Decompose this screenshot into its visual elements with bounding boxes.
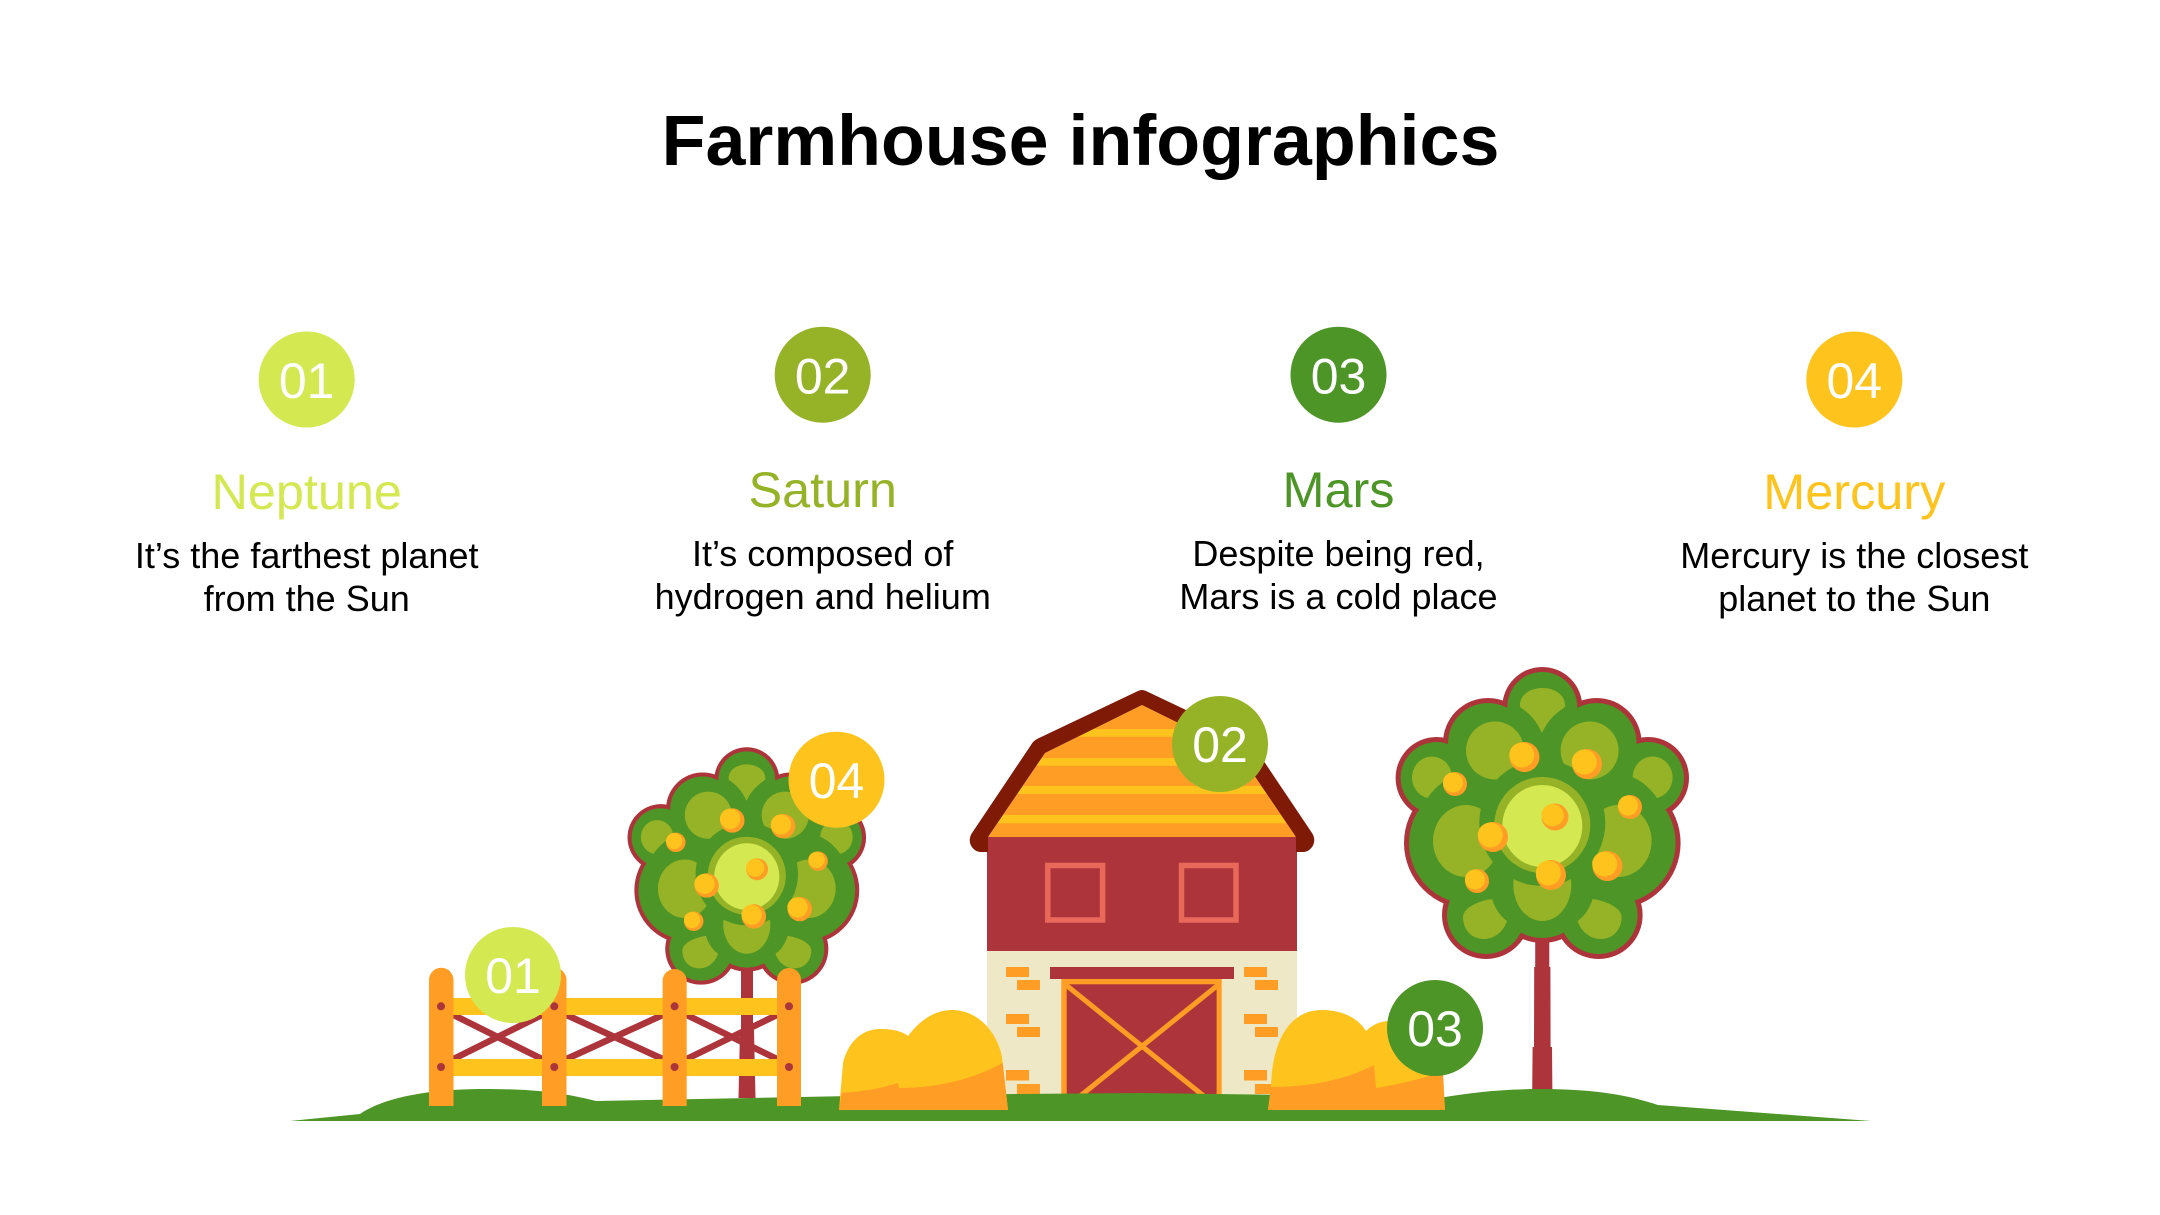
right hay bale [1268,1010,1445,1110]
left hay bale [839,1010,1008,1110]
illustration badge 04 on small tree [788,732,884,828]
description Mercury: planet to the Sun [1718,578,1990,619]
panel: 01 Neptune [135,332,478,619]
panel: 02 Saturn [655,327,991,617]
ground [290,1089,1871,1121]
barn walls [987,836,1297,1097]
barn windows [1048,866,1236,920]
fence [429,968,801,1106]
barn door [1050,967,1234,1097]
panel: 04 Mercury [1680,332,2028,619]
number badge 03: 03 [1311,348,1366,404]
number badge 03 [1290,327,1386,423]
heading Neptune: Neptune [211,463,402,520]
number badge 01 [259,332,355,428]
illustration badge 01 on fence [465,927,561,1023]
description Saturn: hydrogen and helium [655,576,991,617]
panel: 03 Mars [1179,327,1498,617]
barn roof [970,690,1314,852]
description Mercury: Mercury is the closest [1680,535,2028,576]
illustration badge 01 on fence: 01 [485,948,541,1004]
illustration badge 03 on hay [1387,980,1483,1076]
heading Saturn: Saturn [748,461,897,518]
number badge 01: 01 [279,353,335,409]
heading Mercury: Mercury [1763,463,1946,520]
illustration badge 03 on hay: 03 [1407,1001,1463,1057]
large apple tree [1396,667,1689,1092]
description Neptune: from the Sun [204,578,410,619]
illustration badge 04 on small tree: 04 [809,753,864,809]
number badge 02 [775,327,871,423]
number badge 04: 04 [1826,353,1882,409]
small apple tree [628,747,866,1098]
illustration badge 02 on barn [1172,696,1268,792]
description Mars: Mars is a cold place [1179,576,1498,617]
bricks [1006,967,1278,1094]
number badge 04 [1806,332,1902,428]
description Saturn: It’s composed of [692,533,954,574]
barn [970,690,1314,1097]
number badge 02: 02 [795,348,851,404]
illustration badge 02 on barn: 02 [1192,717,1248,773]
description Neptune: It’s the farthest planet [135,535,478,576]
heading Mars: Mars [1283,461,1394,518]
title: Farmhouse infographics [662,101,1499,181]
description Mars: Despite being red, [1192,533,1485,574]
